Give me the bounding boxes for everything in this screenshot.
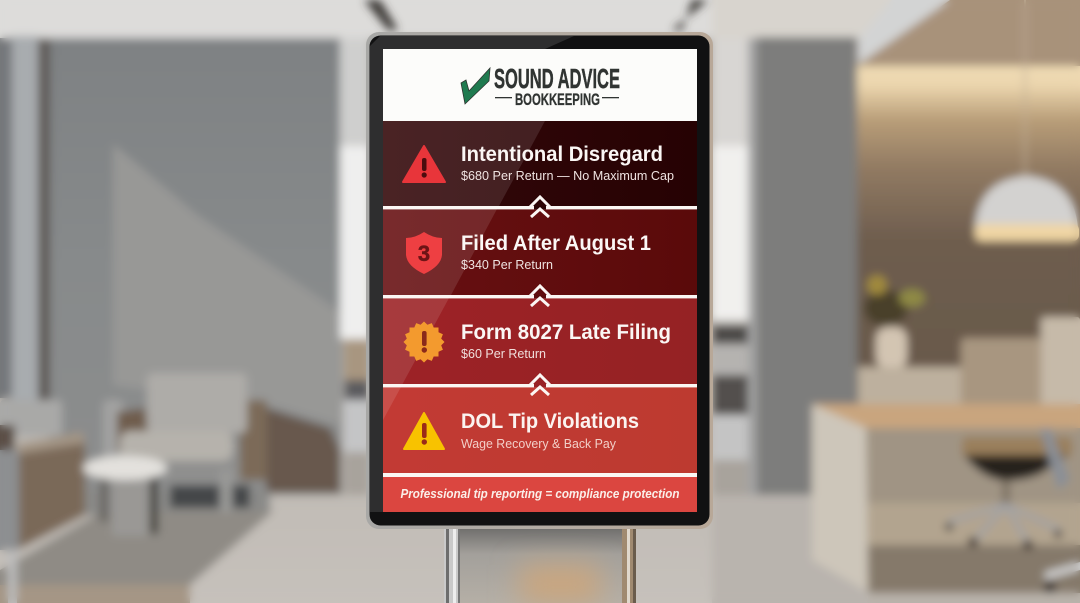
- screen: [383, 49, 697, 512]
- logo check mark: [461, 68, 490, 104]
- stand post: [444, 528, 636, 603]
- arrow: escalation chevrons 1: [530, 197, 550, 217]
- detail: $340 Per Return: [461, 257, 553, 272]
- logo wordmark: SOUND ADVICE: [494, 63, 620, 94]
- detail: $680 Per Return — No Maximum Cap: [461, 168, 674, 183]
- logo subtitle: BOOKKEEPING: [515, 90, 600, 109]
- icon: red warning triangle: [403, 146, 445, 182]
- tier 4: dol tip violations: [383, 387, 697, 473]
- icon: yellow warning triangle: [404, 413, 444, 449]
- logo header: [383, 49, 697, 121]
- arrow: escalation chevrons 3: [530, 375, 550, 395]
- detail: $60 Per Return: [461, 346, 546, 361]
- arrow: escalation chevrons 2: [530, 286, 550, 306]
- footer banner: Professional tip reporting = compliance protection: [400, 487, 680, 501]
- footer banner: [383, 477, 697, 512]
- heading: Filed After August 1: [461, 232, 651, 255]
- tier 2: filed after august 1: [383, 209, 697, 295]
- heading: Intentional Disregard: [461, 143, 663, 166]
- divider lines: [383, 206, 697, 477]
- tier 3: form 8027 late filing: [383, 298, 697, 384]
- tier 1: intentional disregard: [383, 121, 697, 206]
- icon: shield with 3: [406, 232, 442, 274]
- heading: DOL Tip Violations: [461, 410, 639, 433]
- heading: Form 8027 Late Filing: [461, 321, 671, 344]
- display frame: [366, 32, 713, 529]
- detail: Wage Recovery & Back Pay: [461, 436, 616, 451]
- icon: shield with 3: 3: [418, 241, 430, 266]
- icon: orange burst badge: [404, 322, 444, 362]
